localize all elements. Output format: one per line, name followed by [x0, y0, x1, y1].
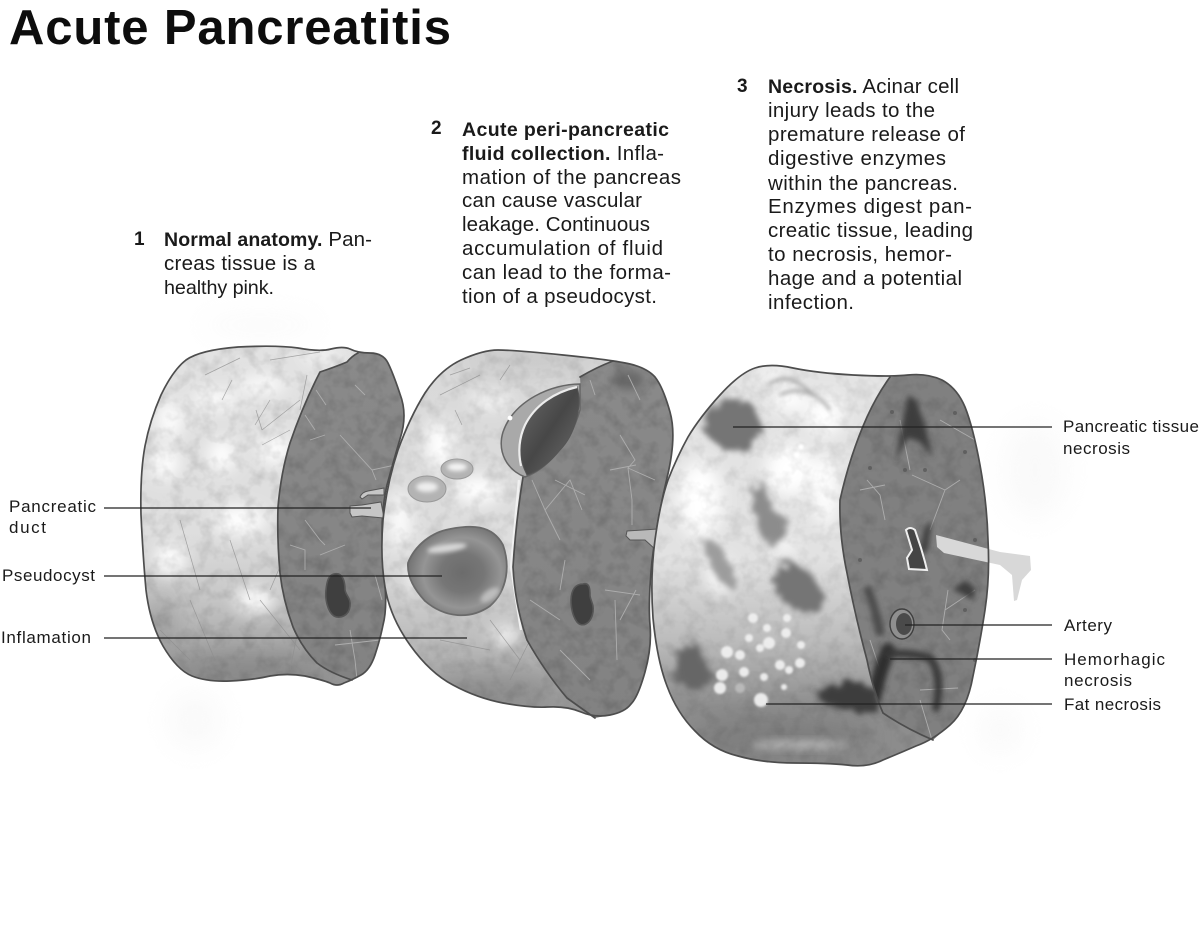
slice 1 outlines: [141, 346, 404, 685]
faint ghost smudges around the illustration: [167, 315, 1067, 754]
leader line: hemorhagic necrosis: [890, 658, 1052, 660]
step 1 text: normal anatomy: creas tissue is a: [164, 252, 316, 275]
leader line: pancreatic tissue necrosis: [733, 426, 1052, 428]
step 2 text: acute peri-pancreatic fluid collection: fluid collection. Infla-: [462, 142, 664, 165]
step 1 text: normal anatomy: [134, 228, 372, 299]
step 3 text: necrosis: 3: [737, 76, 748, 97]
label: fat necrosis: Fat necrosis: [1064, 695, 1161, 714]
step 1 text: normal anatomy: Normal anatomy. Pan-: [164, 228, 372, 251]
slice 2 outlines: [382, 350, 673, 716]
slice 3 outlines: [652, 366, 989, 766]
label: pancreatic duct: Pancreatic: [9, 497, 96, 516]
step 3 text: necrosis: digestive enzymes: [768, 147, 946, 170]
slice 1 pancreatic duct: [350, 488, 384, 518]
step 2 text: acute peri-pancreatic fluid collection: leakage. Continuous: [462, 213, 650, 236]
step 3 text: necrosis: creatic tissue, leading: [768, 219, 973, 242]
slice 1 artery: [326, 574, 350, 617]
leader line: pseudocyst: [104, 575, 442, 577]
step 2 text: acute peri-pancreatic fluid collection: [431, 118, 681, 308]
step 2 text: acute peri-pancreatic fluid collection: tion of a pseudocyst.: [462, 285, 657, 308]
step 1 text: normal anatomy: healthy pink.: [164, 277, 274, 299]
slice 3 necrotic duct: [906, 528, 927, 570]
leader line: inflamation: [104, 637, 467, 639]
slice 1 outer surface: [142, 347, 357, 684]
label: pancreatic duct: duct: [9, 518, 46, 537]
step 3 text: necrosis: to necrosis, hemor-: [768, 243, 952, 266]
slice 1: normal pancreas: [140, 345, 405, 686]
step 2 text: acute peri-pancreatic fluid collection: mation of the pancreas: [462, 166, 681, 189]
step 3 text: necrosis: Necrosis. Acinar cell: [768, 75, 959, 98]
slice 2 duct: [626, 529, 658, 550]
slice 2 cut face: [514, 362, 672, 718]
slice 2 pseudocyst: [408, 527, 507, 615]
label: pancreatic duct: [9, 497, 96, 537]
leader line: fat necrosis: [766, 703, 1052, 705]
step 3 text: necrosis: hage and a potential: [768, 267, 962, 290]
slice 3 outer surface: [652, 366, 929, 765]
title: Acute Pancreatitis: [9, 1, 451, 55]
label: hemorhagic necrosis: [1064, 650, 1166, 690]
label: pancreatic tissue necrosis: [1063, 417, 1199, 458]
step 2 text: acute peri-pancreatic fluid collection: can cause vascular: [462, 189, 642, 212]
slice 2 artery: [571, 584, 593, 625]
step 2 text: acute peri-pancreatic fluid collection: can lead to the forma-: [462, 261, 671, 284]
step 3 text: necrosis: premature release of: [768, 123, 965, 146]
slice 3 duct stub: [936, 535, 1031, 601]
slice 2 outer surface: [382, 350, 610, 714]
label: inflamation: Inflamation: [1, 628, 91, 647]
label: artery: Artery: [1064, 616, 1112, 635]
slice 2 small cysts: [408, 459, 473, 502]
label: pseudocyst: Pseudocyst: [2, 566, 95, 585]
slice 2 upper fluid pocket: [501, 384, 580, 477]
slice 3 fat necrosis dots: [714, 613, 805, 707]
slice 3 necrotic patches: [672, 397, 878, 712]
slice 2: fluid collection: [375, 345, 685, 725]
step 2 text: acute peri-pancreatic fluid collection: accumulation of fluid: [462, 237, 663, 260]
step 3 text: necrosis: [737, 75, 973, 314]
slice 1 cut face: [278, 353, 404, 679]
step 3 text: necrosis: within the pancreas.: [767, 172, 958, 195]
step 2 text: acute peri-pancreatic fluid collection: 2: [431, 118, 442, 139]
step 3 text: necrosis: injury leads to the: [768, 99, 935, 122]
step 3 text: necrosis: Enzymes digest pan-: [768, 195, 972, 218]
slice 3 cut face: [840, 375, 988, 740]
label: pancreatic tissue necrosis: necrosis: [1063, 439, 1130, 458]
leader line: artery: [905, 624, 1052, 626]
leader line: pancreatic duct: [104, 507, 371, 509]
step 3 text: necrosis: infection.: [768, 291, 854, 314]
slice 3: necrosis: [645, 358, 1031, 773]
step 2 text: acute peri-pancreatic fluid collection: Acute peri-pancreatic: [462, 119, 669, 141]
label: hemorhagic necrosis: Hemorhagic: [1064, 650, 1166, 669]
step 1 text: normal anatomy: 1: [134, 229, 145, 250]
slice 3 artery: [890, 609, 914, 639]
label: pancreatic tissue necrosis: Pancreatic tissue: [1063, 417, 1199, 436]
label: hemorhagic necrosis: necrosis: [1064, 671, 1132, 690]
